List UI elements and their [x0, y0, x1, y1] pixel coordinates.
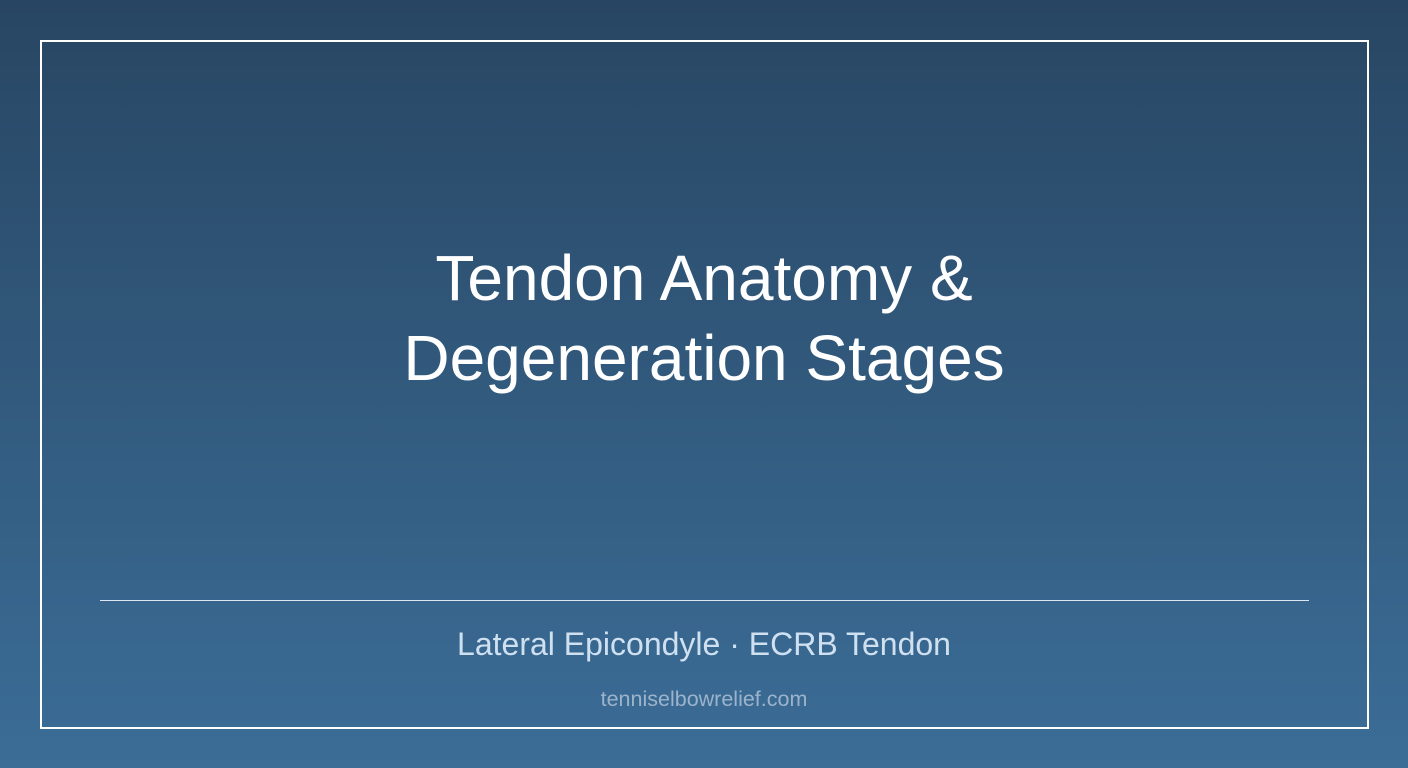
title: Degeneration Stages — [403, 322, 1005, 394]
subtitle: Lateral Epicondyle · ECRB Tendon — [457, 626, 951, 662]
website url: tenniselbowrelief.com — [601, 687, 807, 711]
title — [403, 242, 1005, 394]
title: Tendon Anatomy & — [435, 242, 973, 314]
